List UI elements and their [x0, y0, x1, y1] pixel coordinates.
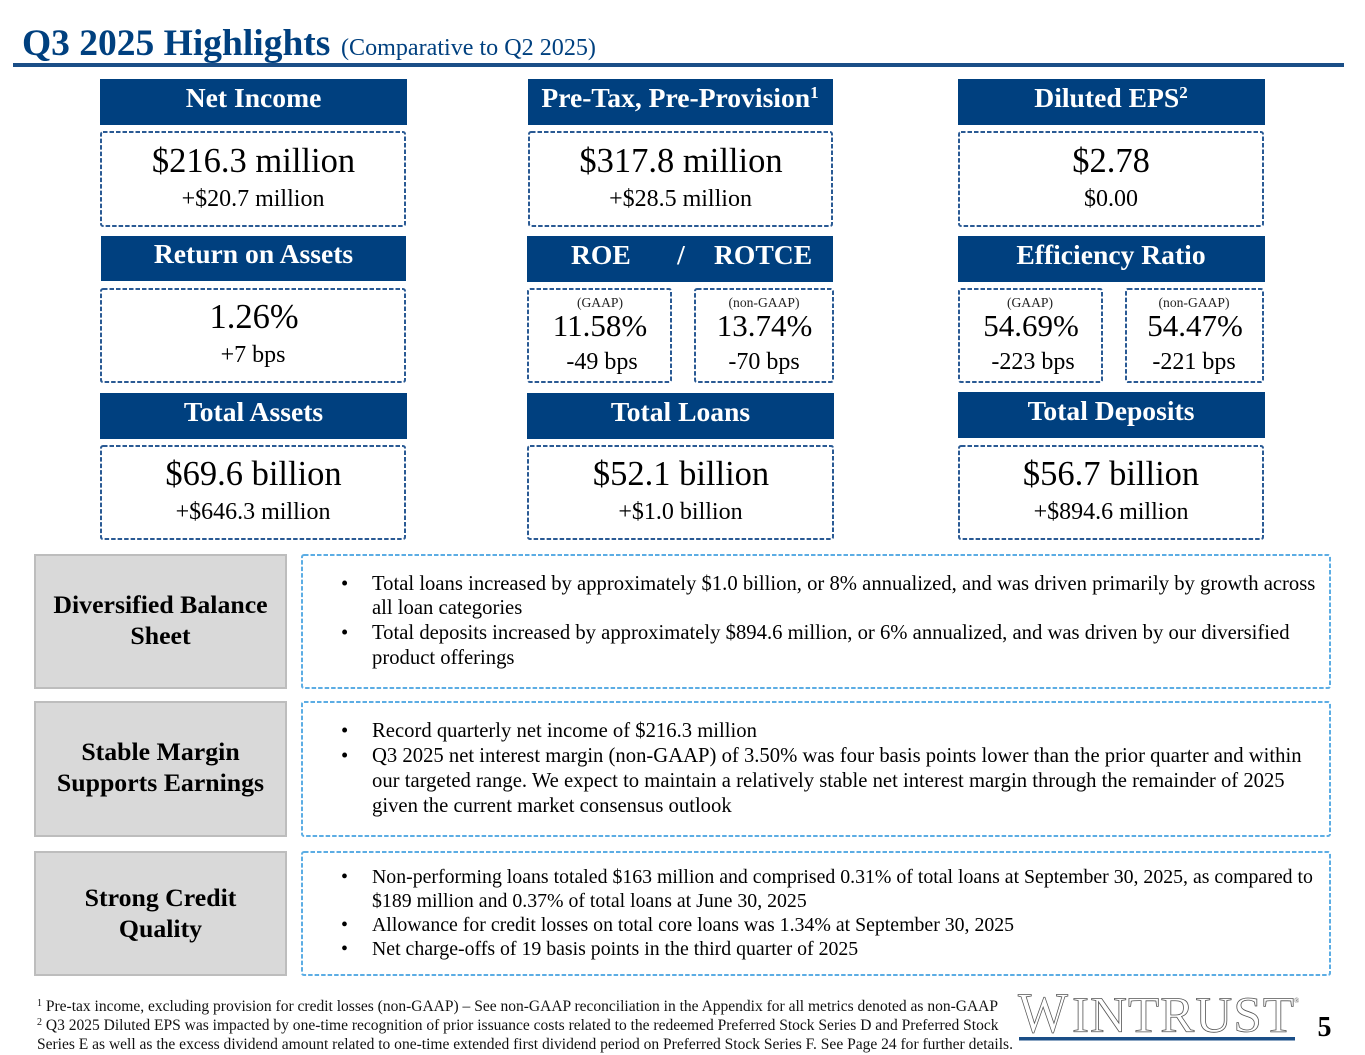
panel: stable margin supports earnings: Supports Earnings	[57, 768, 264, 797]
panel: return on assets: 1.26%	[209, 298, 299, 336]
panel: total loans	[527, 393, 834, 539]
panel: strong credit quality: •	[341, 914, 348, 936]
footnotes: 1	[37, 998, 42, 1009]
panel: diluted EPS	[958, 79, 1265, 226]
footnotes: Series E as well as the excess dividend amount related to one-time extended first dividend period on Preferred Stock Series F. See Page 24 for further details.	[37, 1036, 1013, 1053]
panel: ROE and ROTCE: 11.58%	[553, 308, 647, 343]
panel: stable margin supports earnings: •	[341, 745, 348, 767]
logo: Wintrust	[1018, 982, 1300, 1045]
panel: pre-tax, pre-provision	[528, 79, 833, 226]
panel: pre-tax, pre-provision: $317.8 million	[579, 142, 783, 180]
panel: pre-tax, pre-provision: +$28.5 million	[609, 186, 752, 212]
panel: net income: +$20.7 million	[182, 186, 324, 212]
panel: efficiency ratio: 54.47%	[1147, 308, 1243, 343]
logo: Wintrust: INTRUST	[1072, 988, 1294, 1044]
title: Q3 2025 Highlights	[22, 23, 330, 64]
panel: diluted EPS: $0.00	[1084, 186, 1138, 212]
panel: total loans: $52.1 billion	[593, 455, 769, 493]
panel: diluted EPS: Diluted EPS	[1034, 82, 1179, 113]
panel: total deposits: Total Deposits	[1028, 395, 1195, 426]
panel: efficiency ratio: (GAAP)	[1007, 295, 1053, 311]
panel: strong credit quality: •	[341, 866, 348, 888]
panel: total deposits	[958, 392, 1265, 539]
panel: total assets: $69.6 billion	[165, 455, 342, 493]
panel: diluted EPS: $2.78	[1072, 142, 1150, 180]
page number: 5	[1318, 1012, 1332, 1043]
panel: ROE and ROTCE: -49 bps	[566, 349, 638, 375]
panel: stable margin supports earnings: •	[341, 720, 348, 742]
panel: total deposits: +$894.6 million	[1034, 499, 1188, 525]
title	[22, 23, 596, 64]
panel: diversified balance sheet: •	[341, 622, 348, 644]
panel: net income: Net Income	[186, 82, 321, 113]
panel: efficiency ratio: (non-GAAP)	[1159, 295, 1229, 311]
panel: stable margin supports earnings	[35, 702, 1330, 836]
panel: stable margin supports earnings: Record quarterly net income of $216.3 million	[372, 720, 758, 742]
panel: total loans: +$1.0 billion	[618, 499, 743, 525]
panel: strong credit quality: $189 million and 0.37% of total loans at June 30, 2025	[372, 890, 807, 912]
panel: diversified balance sheet: Sheet	[130, 621, 191, 650]
panel: diversified balance sheet: •	[341, 573, 348, 595]
panel: diversified balance sheet: Diversified Balance	[53, 590, 268, 619]
panel: total loans: Total Loans	[611, 396, 750, 427]
panel: efficiency ratio: Efficiency Ratio	[1016, 239, 1206, 270]
panel: pre-tax, pre-provision: Pre-Tax, Pre-Provision	[541, 82, 810, 113]
footnotes: Pre-tax income, excluding provision for credit losses (non-GAAP) – See non-GAAP reconciliation in the Appendix for all metrics denoted as non-GAAP	[42, 998, 998, 1015]
panel: diversified balance sheet: product offerings	[372, 647, 514, 669]
panel: net income: $216.3 million	[152, 142, 355, 180]
panel: diversified balance sheet: Total deposits increased by approximately $894.6 million, or 6% annualized, and was driven by our diversified	[372, 622, 1290, 644]
panel: stable margin supports earnings: Stable Margin	[81, 737, 240, 766]
panel: return on assets: +7 bps	[221, 342, 285, 368]
panel: diluted EPS: 2	[1179, 83, 1188, 102]
panel: stable margin supports earnings: our targeted range. We expect to maintain a relatively stable net interest margin through the remainder of 2025	[372, 770, 1285, 792]
panel: strong credit quality: Allowance for credit losses on total core loans was 1.34% at September 30, 2025	[372, 914, 1014, 936]
panel: ROE and ROTCE: (non-GAAP)	[729, 295, 799, 311]
panel: efficiency ratio	[958, 236, 1265, 382]
logo: Wintrust: ®	[1294, 997, 1300, 1005]
panel: strong credit quality	[35, 852, 1330, 975]
panel: total assets: +$646.3 million	[176, 499, 330, 525]
logo: Wintrust: W	[1018, 982, 1068, 1045]
panel: diversified balance sheet	[35, 555, 1330, 688]
panel: efficiency ratio: -223 bps	[991, 349, 1075, 375]
title: (Comparative to Q2 2025)	[341, 35, 596, 61]
panel: pre-tax, pre-provision: 1	[810, 83, 819, 102]
panel: net income	[100, 79, 407, 226]
panel: ROE and ROTCE: /	[676, 239, 685, 270]
panel: total assets	[100, 393, 407, 539]
panel: total deposits: $56.7 billion	[1023, 455, 1199, 493]
panel: total assets: Total Assets	[184, 396, 323, 427]
footnotes: 2	[37, 1017, 42, 1028]
panel: stable margin supports earnings: Q3 2025 net interest margin (non-GAAP) of 3.50% was four basis points lower than the prior quarter and within	[372, 745, 1302, 767]
panel: efficiency ratio: -221 bps	[1152, 349, 1236, 375]
panel: return on assets	[101, 236, 406, 382]
panel: ROE and ROTCE: (GAAP)	[577, 295, 623, 311]
panel: diversified balance sheet: all loan categories	[372, 597, 522, 619]
panel: ROE and ROTCE	[527, 236, 833, 382]
panel: ROE and ROTCE: 13.74%	[717, 308, 812, 343]
footnotes	[37, 998, 1013, 1053]
panel: strong credit quality: •	[341, 938, 348, 960]
panel: stable margin supports earnings: given the current market consensus outlook	[372, 795, 732, 817]
panel: ROE and ROTCE: -70 bps	[728, 349, 800, 375]
panel: ROE and ROTCE: ROTCE	[714, 239, 812, 270]
panel: strong credit quality: Non-performing loans totaled $163 million and comprised 0.31% of total loans at September 30, 2025, as compared to	[372, 866, 1313, 888]
panel: strong credit quality: Net charge-offs of 19 basis points in the third quarter of 2025	[372, 938, 858, 960]
panel: return on assets: Return on Assets	[154, 238, 353, 269]
panel: strong credit quality: Strong Credit	[85, 883, 237, 912]
panel: ROE and ROTCE: ROE	[571, 239, 631, 270]
panel: strong credit quality: Quality	[119, 914, 202, 943]
footnotes: Q3 2025 Diluted EPS was impacted by one-time recognition of prior issuance costs related to the redeemed Preferred Stock Series D and Preferred Stock	[42, 1017, 999, 1034]
panel: diversified balance sheet: Total loans increased by approximately $1.0 billion, or 8% annualized, and was driven primarily by growth across	[372, 573, 1315, 595]
panel: efficiency ratio: 54.69%	[983, 308, 1079, 343]
